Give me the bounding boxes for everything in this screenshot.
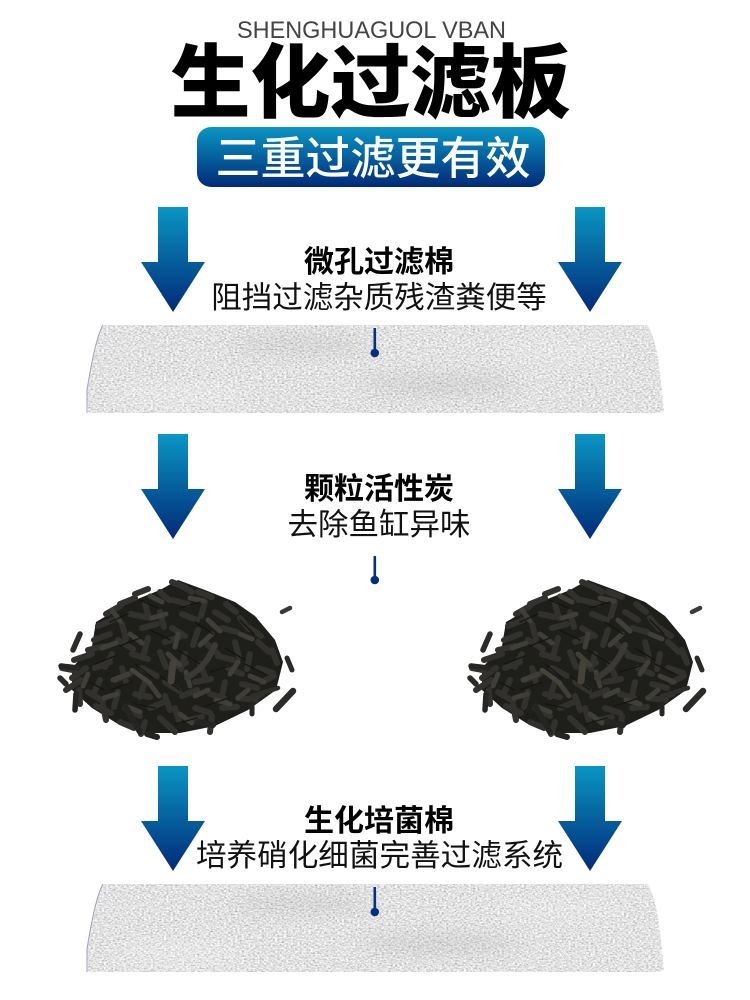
- heading: 微孔过滤棉: 微孔过滤棉: [304, 246, 454, 279]
- heading: 颗粒活性炭: 颗粒活性炭: [304, 473, 454, 506]
- panel: biological culture cotton: [85, 882, 667, 974]
- arrow: row 3 right: [558, 766, 622, 871]
- subtitle: pinyin line: SHENGHUAGUOL VBAN: [237, 17, 506, 44]
- arrow: row 3 left: [141, 766, 205, 871]
- marker: row 3 connector: [370, 887, 379, 916]
- panel: micropore filter cotton: [85, 323, 667, 415]
- text: 阻挡过滤杂质残渣粪便等: 阻挡过滤杂质残渣粪便等: [211, 281, 547, 315]
- arrow: row 1 right: [558, 207, 622, 312]
- image: activated carbon pile left: [60, 580, 293, 737]
- arrow: row 2 right: [558, 434, 622, 539]
- title: 生化过滤板: [170, 19, 570, 135]
- arrow: row 2 left: [141, 434, 205, 539]
- image: activated carbon pile right: [470, 580, 703, 737]
- heading: 生化培菌棉: 生化培菌棉: [304, 805, 454, 838]
- marker: row 2 connector: [370, 556, 379, 584]
- text: 培养硝化细菌完善过滤系统: 培养硝化细菌完善过滤系统: [196, 839, 563, 873]
- arrow: row 1 left: [141, 207, 205, 312]
- banner: 三重过滤更有效: 三重过滤更有效: [215, 122, 531, 187]
- marker: row 1 connector: [370, 328, 379, 357]
- text: 去除鱼缸异味: 去除鱼缸异味: [288, 508, 470, 542]
